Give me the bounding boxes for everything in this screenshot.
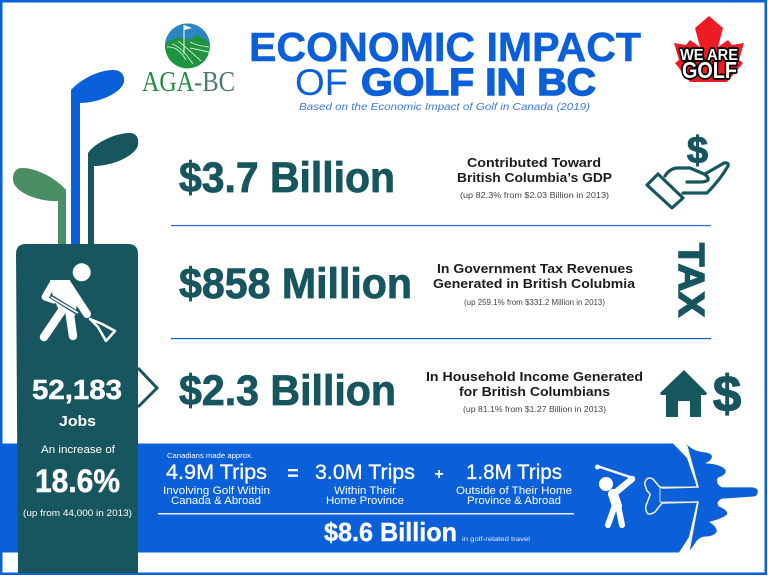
travel total note: in golf-related travel xyxy=(462,536,531,543)
outside province trips: Outside of Their Home xyxy=(456,485,572,497)
icon: golf club green xyxy=(13,168,66,244)
equals sign: = xyxy=(287,463,299,485)
title line 1: ECONOMIC IMPACT xyxy=(249,24,641,70)
stat: income description: (up 81.1% from $1.27 Billion in 2013) xyxy=(463,405,606,414)
icon: hand with dollar: $ xyxy=(687,130,708,172)
home province trips xyxy=(315,461,415,507)
home province trips: Home Province xyxy=(326,495,404,507)
total trips: Involving Golf Within xyxy=(163,485,270,497)
logo: We Are Golf xyxy=(674,16,744,83)
total trips xyxy=(163,461,270,507)
icon: house and dollar: $ xyxy=(713,365,741,422)
stat: tax description: (up 259.1% from $331.2 Million in 2013) xyxy=(464,298,605,307)
icon: house and dollar xyxy=(660,365,741,422)
outside province trips xyxy=(456,461,572,507)
total trips: 4.9M Trips xyxy=(166,461,267,484)
stat: GDP value: $3.7 Billion xyxy=(179,154,395,202)
travel text xyxy=(163,451,572,507)
home province trips: Within Their xyxy=(334,485,396,497)
stat: income value: $2.3 Billion xyxy=(179,367,396,415)
plus sign: + xyxy=(434,466,444,483)
trips intro: Canadians made approx. xyxy=(167,451,253,460)
icon: TAX: TAX xyxy=(671,243,712,317)
icon: golfer xyxy=(595,464,633,525)
arrow: chevron xyxy=(138,368,157,407)
total trips: Canada & Abroad xyxy=(171,495,261,507)
increase percentage: 18.6% xyxy=(35,463,120,499)
stat: GDP description xyxy=(457,156,612,200)
logo: AGA-BC: AGA xyxy=(142,67,195,98)
stat: income description: for British Columbians xyxy=(459,385,610,399)
logo: We Are Golf: GOLF xyxy=(682,57,737,83)
icon: hand with dollar xyxy=(647,130,728,208)
home province trips: 3.0M Trips xyxy=(315,461,415,484)
stat: GDP description: British Columbia’s GDP xyxy=(457,171,612,185)
icon: golf club dark xyxy=(88,133,138,244)
subtitle: Based on the Economic Impact of Golf in Canada (2019) xyxy=(299,101,590,113)
logo: AGA-BC: -BC xyxy=(194,67,235,98)
stat: tax description: In Government Tax Revenues xyxy=(437,262,633,276)
logo: We Are Golf: WE ARE xyxy=(680,47,738,64)
icon: worker with shovel xyxy=(44,263,115,341)
logo: AGA-BC xyxy=(142,23,235,98)
increase label: An increase of xyxy=(41,444,116,456)
outside province trips: 1.8M Trips xyxy=(466,461,562,484)
travel divider xyxy=(158,513,574,514)
increase note: (up from 44,000 in 2013) xyxy=(23,508,132,519)
stat: income description: In Household Income Generated xyxy=(426,370,643,384)
icon: airplane xyxy=(645,442,758,551)
stat: tax description xyxy=(433,262,636,307)
stat: tax value: $858 Million xyxy=(179,260,412,308)
stat: GDP description: (up 82.3% from $2.03 Billion in 2013) xyxy=(460,191,609,200)
divider xyxy=(171,338,711,339)
travel total: $8.6 Billion xyxy=(324,517,457,547)
panel: golf bag jobs xyxy=(16,244,138,573)
stat: tax description: Generated in British Colubmia xyxy=(433,277,636,291)
divider xyxy=(171,225,711,226)
title line 2: GOLF IN BC xyxy=(361,62,596,104)
stat: income description xyxy=(426,370,643,414)
stat: GDP description: Contributed Toward xyxy=(467,156,601,170)
jobs label: Jobs xyxy=(59,413,96,430)
jobs figure: 52,183 xyxy=(32,374,122,405)
banner: travel xyxy=(0,442,758,552)
outside province trips: Province & Abroad xyxy=(467,495,561,507)
icon: golf club blue xyxy=(71,70,124,244)
title line 2: OF xyxy=(295,62,348,103)
